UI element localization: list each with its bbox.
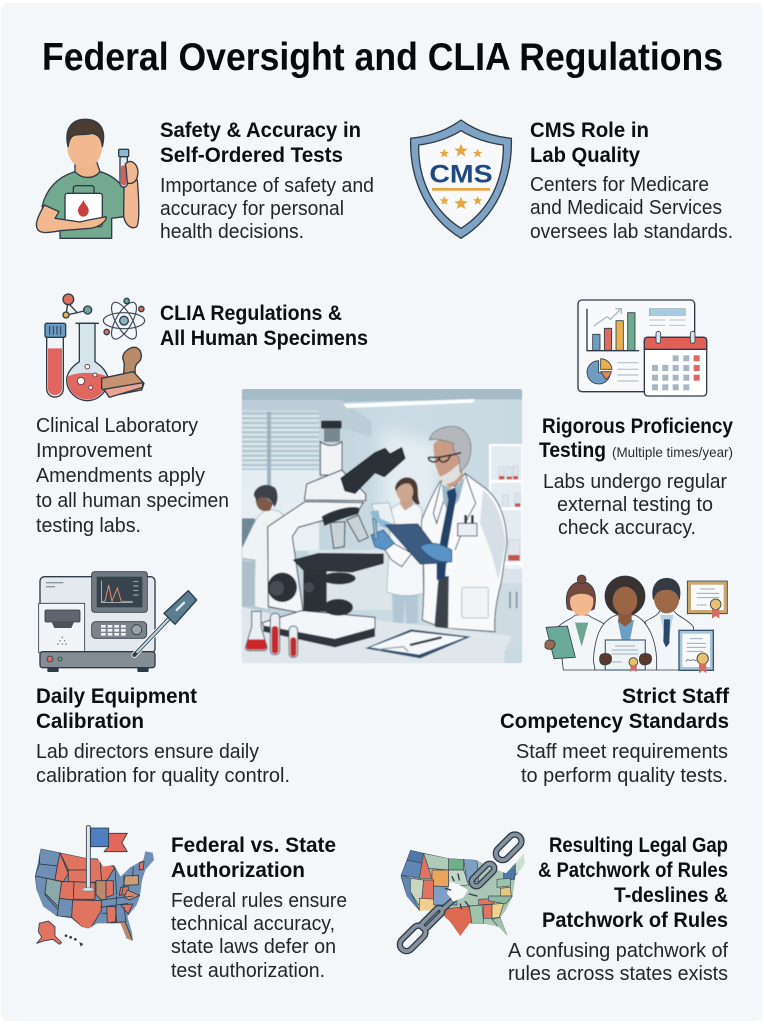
heading: legal gap: T-deslines & (614, 884, 728, 907)
text: staff description: to perform quality tests. (521, 765, 728, 787)
scientist holding clipboard (371, 426, 507, 632)
heading: CMS (530, 119, 649, 167)
text: calibration description: Lab directors ensure daily (36, 741, 259, 763)
text: CLIA description (36, 415, 229, 537)
woman at left (545, 575, 610, 670)
bench (242, 607, 512, 663)
back counter (308, 550, 392, 610)
text: safety description (160, 175, 374, 243)
heading: CMS: Lab Quality (530, 144, 640, 167)
heading: proficiency testing: Rigorous Proficiency (542, 415, 733, 438)
shelves (488, 444, 522, 609)
icon: analyzer machine and pipette (39, 572, 197, 672)
text: safety description: Importance of safety and (160, 175, 374, 197)
text: federal description: test authorization. (171, 960, 325, 982)
text: federal description: technical accuracy, (171, 913, 335, 935)
text: proficiency description: check accuracy. (558, 517, 696, 539)
text: CLIA description: Amendments apply (36, 465, 205, 487)
certificates (679, 581, 727, 673)
heading: proficiency testing: Testing (539, 439, 606, 462)
heading: federal vs state: Federal vs. State (171, 834, 336, 857)
heading: safety: Safety & Accuracy in (160, 119, 361, 142)
heading: proficiency testing (539, 415, 733, 462)
colleague with clipboard (370, 477, 423, 623)
text: CLIA description: Clinical Laboratory (36, 415, 198, 437)
text: legal gap description: A confusing patchwork of (508, 940, 728, 962)
icon: patchwork map with broken chain (397, 832, 529, 954)
heading: legal gap: Patchwork of Rules (542, 909, 728, 932)
heading: CLIA: All Human Specimens (160, 327, 368, 350)
heading: federal vs state: Authorization (171, 859, 305, 882)
text: federal description: Federal rules ensure (171, 890, 347, 912)
text: legal gap description (508, 940, 728, 985)
heading: legal gap (538, 834, 728, 932)
woman in center (593, 576, 657, 672)
text: calibration description: calibration for quality control. (36, 765, 290, 787)
heading: staff: Competency Standards (500, 710, 729, 733)
text: CMS description: and Medicaid Services (530, 197, 722, 219)
heading: calibration: Daily Equipment (36, 685, 197, 708)
panel: CLIA regulations (36, 294, 368, 537)
text: CMS description: Centers for Medicare (530, 174, 709, 196)
window with blinds (242, 411, 319, 551)
text: federal description (171, 890, 347, 982)
panel: proficiency testing (539, 300, 733, 539)
central illustration: lab scene with microscope (242, 388, 522, 663)
heading: staff: Strict Staff (622, 685, 730, 708)
heading: legal gap: Resulting Legal Gap (549, 834, 728, 857)
icon: CMS shield: CMS (429, 161, 493, 189)
flask and test tubes (246, 611, 298, 657)
heading: CMS: CMS Role in (530, 119, 649, 142)
colleague at left (242, 485, 284, 610)
text: staff description: Staff meet requirements (516, 741, 728, 763)
heading: calibration (36, 685, 197, 733)
icon: lab glassware, atom and stamp (45, 294, 145, 401)
heading: safety: Self-Ordered Tests (160, 144, 343, 167)
heading: federal vs state (171, 834, 336, 882)
microscope (262, 421, 405, 647)
ceiling and light (242, 388, 522, 520)
text: proficiency description: Labs undergo regular (543, 471, 727, 493)
text: CMS description (530, 174, 733, 243)
text: CMS description: oversees lab standards. (530, 221, 733, 243)
text: proficiency description (543, 471, 727, 539)
text: CLIA description: Improvement (36, 440, 152, 462)
text: CLIA description: to all human specimen (36, 490, 229, 512)
text: legal gap description: rules across states exists (508, 963, 728, 985)
text: calibration description (36, 741, 290, 787)
icon: US map with flag (30, 826, 160, 947)
panel: federal vs state (30, 826, 347, 982)
panel: safety and accuracy (36, 119, 374, 243)
heading: CLIA: CLIA Regulations & (160, 302, 342, 325)
text: staff description (516, 741, 728, 787)
wall background (242, 388, 522, 663)
panel: CMS role (411, 119, 733, 243)
heading: CLIA (160, 302, 368, 350)
heading: proficiency testing: (Multiple times/year) (612, 444, 733, 460)
clipboard on bench (365, 629, 471, 658)
man at right (645, 578, 695, 670)
icon: person with test tube and kit (36, 119, 139, 238)
text: safety description: health decisions. (160, 221, 304, 243)
heading: safety (160, 119, 361, 167)
text: proficiency description: external testing to (557, 494, 713, 516)
icon: CMS shield (411, 120, 511, 238)
text: safety description: accuracy for personal (160, 198, 344, 220)
panel: staff competency (500, 575, 730, 787)
heading: staff (500, 685, 730, 733)
panel: legal gap and patchwork (397, 832, 728, 985)
text: federal description: state laws defer on (171, 936, 336, 958)
text: CLIA description: testing labs. (36, 515, 141, 537)
heading: calibration: Calibration (36, 710, 144, 733)
icon: staff with certificates (545, 575, 727, 673)
panel: equipment calibration (36, 572, 290, 787)
icon: chart report and calendar (578, 300, 707, 396)
heading: legal gap: & Patchwork of Rules (538, 859, 728, 882)
